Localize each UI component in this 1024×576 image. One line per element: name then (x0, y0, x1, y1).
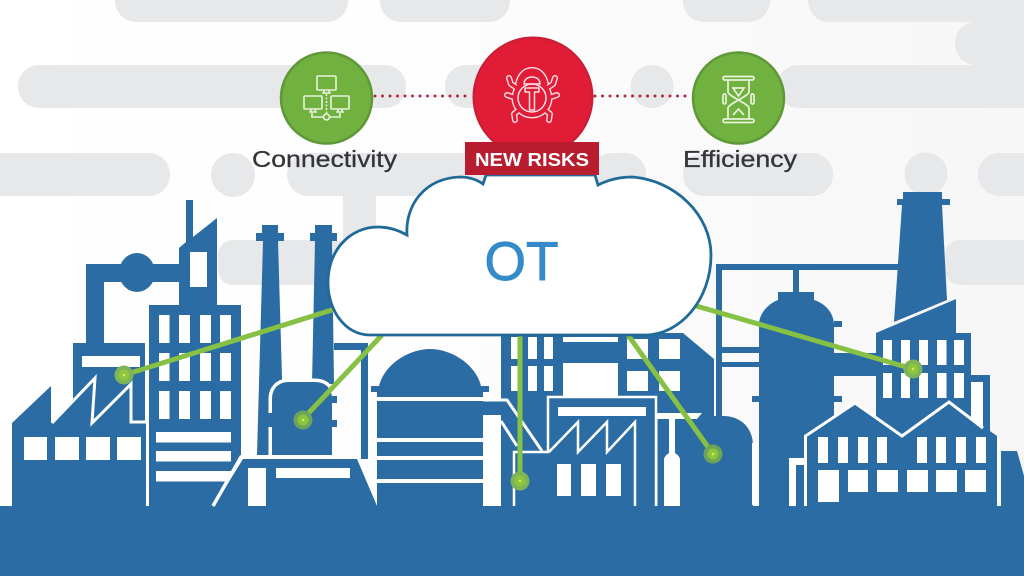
gable outline (806, 402, 983, 506)
pipe with ball valve (86, 253, 181, 344)
right edge white line (997, 437, 1000, 502)
tower windows (156, 315, 231, 482)
icon: connected monitors (304, 76, 349, 120)
white slot (752, 443, 758, 505)
central windows (511, 337, 680, 396)
chimney one (256, 225, 284, 455)
upper plant block (73, 343, 145, 424)
OT label: OT (484, 230, 558, 292)
connecting pipe (334, 343, 368, 459)
bug silhouette outline (507, 70, 557, 120)
new risks text: NEW RISKS (475, 149, 589, 170)
thin white line (655, 416, 658, 506)
right tower windows (883, 340, 964, 398)
factory outline (52, 378, 146, 423)
tank nubs (268, 396, 337, 427)
node 4 (704, 444, 722, 464)
icon: bug (507, 70, 557, 120)
domed tank (371, 349, 489, 506)
right tower (876, 299, 990, 445)
tall tower (149, 305, 241, 506)
OT cloud (328, 175, 711, 335)
upper plant window (82, 356, 140, 367)
central factory (513, 396, 656, 506)
connectivity label: Connectivity (252, 146, 397, 172)
icon: hourglass (723, 76, 754, 122)
left industrial buildings (12, 200, 377, 506)
background cloud pills (0, 0, 1024, 285)
right industrial buildings (716, 192, 1024, 506)
column nubs (752, 321, 842, 402)
tower white slot (971, 382, 983, 428)
central factory outline (514, 397, 656, 506)
base door and window (248, 468, 350, 506)
connectivity circle (281, 52, 372, 144)
base slant line (213, 457, 358, 506)
central block (501, 333, 714, 416)
efficiency label: Efficiency (683, 146, 797, 172)
ground (0, 506, 1024, 576)
lower twin-gable building (806, 402, 997, 506)
lower building windows (818, 437, 986, 502)
base block (214, 459, 377, 506)
node 5 (904, 360, 922, 378)
dotted connector right (595, 94, 692, 98)
bug silhouette inner (507, 70, 557, 120)
pipe frame (716, 264, 906, 417)
network nodes (114, 360, 922, 490)
small tank (272, 382, 332, 455)
large stack (894, 192, 950, 322)
new risks banner (465, 142, 599, 175)
chimney two (310, 225, 337, 384)
tower top with antenna (179, 200, 217, 305)
connector lines (483, 400, 542, 451)
new risks circle (474, 38, 592, 156)
dotted connector left (375, 94, 472, 98)
node 3 (510, 472, 530, 490)
dome bands (377, 397, 483, 483)
connector block (483, 400, 547, 506)
right edge block (1001, 451, 1024, 506)
central factory windows (557, 464, 621, 496)
central industrial buildings (371, 333, 753, 506)
right tank (657, 416, 753, 506)
left saw-tooth factory (12, 380, 146, 506)
shed inset (796, 465, 804, 506)
node 2 (294, 410, 312, 430)
central factory bar (558, 407, 646, 416)
factory windows (24, 437, 141, 460)
green connection lines (124, 305, 913, 481)
tower top window (190, 252, 207, 287)
tank link (834, 353, 879, 376)
central sawtooth (549, 422, 635, 506)
T-shaped column (657, 413, 702, 506)
efficiency circle (693, 52, 784, 144)
white column (483, 415, 501, 506)
small shed (789, 458, 806, 506)
node 1 (114, 366, 134, 384)
column tank (759, 292, 834, 506)
bug details (518, 77, 546, 112)
lower fill (748, 437, 752, 506)
